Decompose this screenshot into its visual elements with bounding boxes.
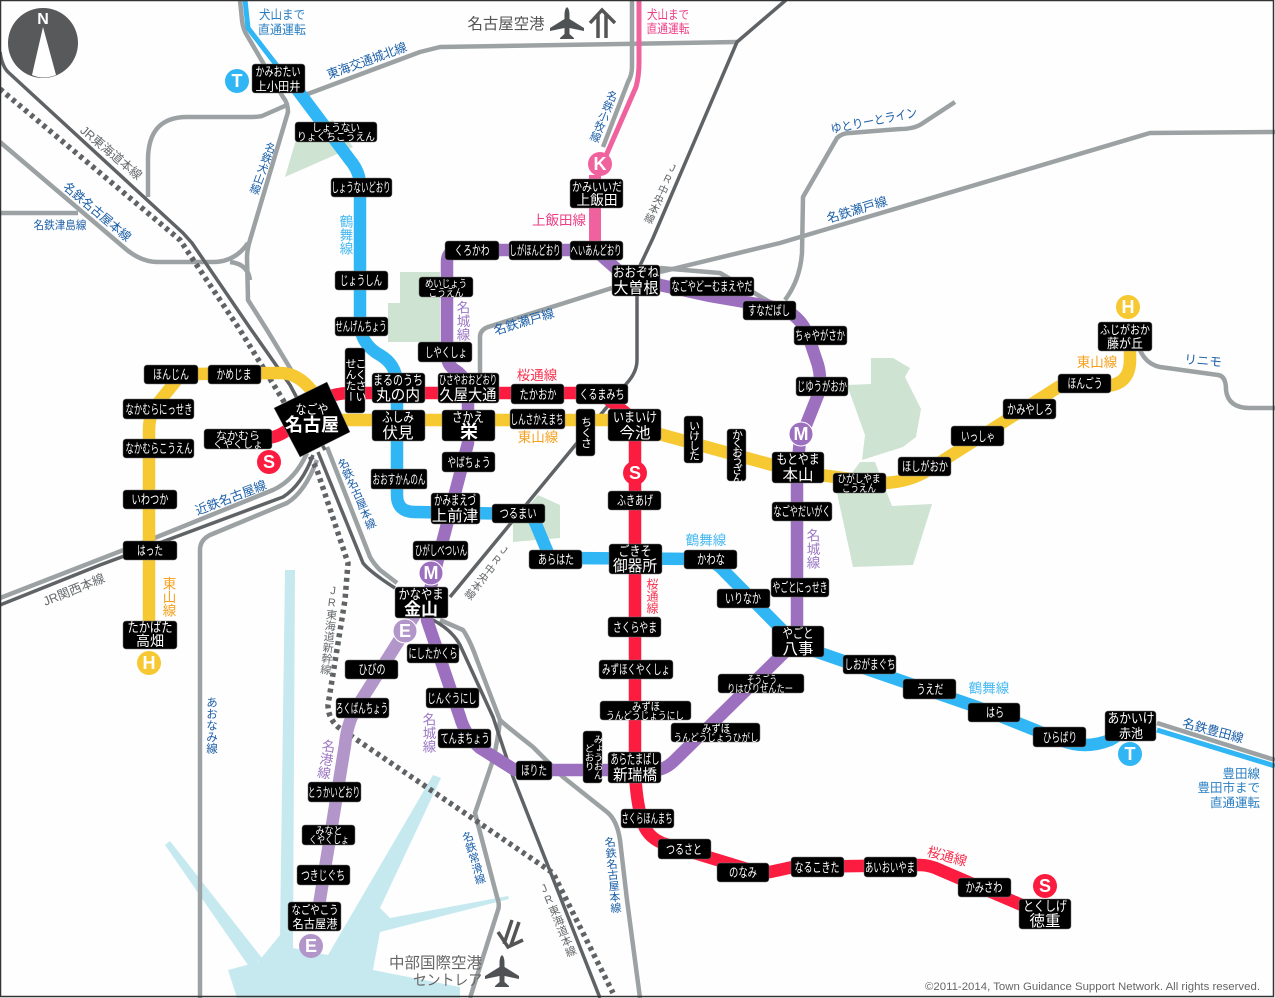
station: 御器所 (609, 544, 662, 575)
station: 中村区役所: なかむら (216, 430, 260, 442)
station: 平安通: へいあんどおり (570, 243, 622, 258)
station: 本郷 (1058, 374, 1111, 393)
label: あおなみ線: あおなみ線 (205, 696, 218, 754)
station: 本郷: ほんごう (1068, 376, 1102, 391)
badge S 中村区役所: S (263, 452, 275, 472)
station: 上社 (1003, 399, 1056, 419)
label: 名鉄犬山線: 名鉄犬山線 (247, 139, 278, 196)
station: いりなか: いりなか (725, 591, 761, 606)
station: 星ヶ丘: ほしがおか (902, 459, 948, 474)
station: 西高蔵 (407, 644, 459, 663)
station: 平安通 (570, 241, 623, 260)
station: 今池 (608, 409, 661, 442)
station: 原: はら (986, 705, 1004, 720)
stations (123, 64, 1156, 931)
station: 東海通: とうかいどおり (308, 785, 360, 800)
station: 名古屋港: 名古屋港 (292, 916, 338, 931)
station: 瑞穂運動場東 (671, 723, 760, 744)
station: 相生山 (864, 857, 917, 877)
station: 中村公園: なかむらこうえん (126, 441, 192, 456)
station: 鳴子北 (791, 857, 844, 877)
station: 今池: いまいけ (613, 410, 657, 425)
station: 名古屋: 名古屋 (285, 415, 339, 435)
station: 八事日赤: やごとにっせき (772, 580, 828, 595)
label: JR東海道新幹線: JR東海道新幹線 (318, 585, 340, 675)
station: 六番町: ろくばんちょう (336, 701, 388, 716)
badge H 藤が丘: H (1122, 297, 1134, 317)
station: 相生山: あいおいやま (865, 860, 915, 875)
badge S 徳重 (1033, 874, 1057, 898)
station: 上前津: かみまえづ (434, 493, 476, 508)
badge T 赤池: T (1124, 744, 1136, 764)
station: 中村日赤 (123, 399, 194, 419)
station: 総合リハビリセンター: そうごう (747, 673, 777, 686)
station: 矢場町 (442, 452, 495, 472)
station: 上前津 (431, 493, 480, 525)
station: 本陣: ほんじん (153, 367, 189, 382)
station: 新瑞橋: 新瑞橋 (613, 766, 657, 784)
station: 茶屋ヶ坂: ちゃやがさか (795, 328, 845, 343)
station: 新栄町 (510, 409, 565, 429)
station: 上小田井 (252, 64, 305, 94)
station: 丸の内: まるのうち (373, 373, 423, 388)
badge T 上小田井: T (232, 71, 242, 91)
station: 自由ヶ丘: じゆうがおか (797, 379, 847, 394)
station: 桜山: さくらやま (613, 620, 657, 635)
label: 豊田線 豊田市まで 直通運転: 豊田線 (1222, 766, 1260, 781)
station: 市役所: しやくしょ (425, 345, 467, 360)
subway line: Tsurumai (blue) (245, 0, 1275, 766)
station: 妙音通 (582, 731, 603, 783)
station: 川名 (684, 550, 737, 569)
label: JR東海道本線 upper: JR東海道本線 (77, 122, 146, 183)
station: 塩釜口: しおがまぐち (844, 657, 896, 672)
station: 上飯田 (570, 179, 623, 208)
station: 東山公園 (833, 472, 886, 494)
station: 自由ヶ丘 (796, 377, 848, 396)
label: 東海交通城北線: 東海交通城北線 (325, 39, 409, 82)
station: 黒川 (445, 241, 499, 260)
badge K: K (594, 154, 606, 174)
station: ナゴヤドーム前矢田 (670, 277, 754, 296)
station: 栄: さかえ (452, 410, 484, 425)
station: 名城公園 (419, 277, 473, 299)
station: 中村区役所 (204, 429, 272, 450)
station: 徳重 (1019, 899, 1071, 930)
badge S 中村区役所 (257, 450, 281, 474)
station: 栄: 栄 (460, 422, 478, 442)
label: 犬山まで直通運転: 犬山まで (259, 8, 305, 22)
subway line: Meijo (purple) (427, 250, 820, 770)
label: 鶴舞線 right: 鶴舞線 (969, 681, 1010, 696)
station: 桜山 (608, 617, 661, 637)
label: 桜通線 top: 桜通線 (517, 368, 558, 383)
station: 国際センター: せんたー (344, 358, 356, 402)
station: 東別院 (413, 541, 468, 560)
station: 中村公園 (123, 439, 194, 458)
subway line: Kamiiida (pink) (595, 0, 639, 250)
station: 妙音通: どおり (582, 744, 594, 771)
label: 豊田線 豊田市まで 直通運転 (1197, 766, 1260, 810)
label: 豊田線 豊田市まで 直通運転: 豊田市まで (1197, 781, 1260, 795)
station: 池下 (684, 416, 703, 463)
station: 名城公園: めいじょう (425, 278, 467, 290)
label: 名鉄名古屋本線 lower: 名鉄名古屋本線 (603, 835, 622, 914)
station: 瑞穂運動場東: うんどうじょうひがし (674, 731, 758, 744)
station: 瑞穂運動場西: うんどうじょうにし (606, 710, 684, 722)
label: 名城線 upper: 名城線 (454, 301, 470, 342)
label: JR関西本線: JR関西本線 (41, 570, 107, 609)
station: 植田 (903, 679, 956, 699)
station: 千種: ちくさ (580, 416, 592, 448)
label: 豊田線 豊田市まで 直通運転: 直通運転 (1210, 795, 1260, 810)
station: 高畑: 高畑 (136, 633, 164, 649)
station: 丸の内: 丸の内 (376, 386, 420, 404)
station: 平針: ひらばり (1043, 730, 1077, 745)
station: 上小田井: 上小田井 (256, 80, 300, 94)
station: 堀田: ほりた (521, 763, 547, 778)
parks (285, 120, 932, 567)
station: 本山 (772, 452, 824, 484)
station: 栄 (442, 410, 495, 442)
station: 東山公園: ひがしやま (838, 472, 880, 485)
label: 東山線 vertical: 東山線 (160, 577, 176, 618)
station: 瑞穂区役所 (599, 660, 673, 679)
station: 市役所 (418, 342, 472, 362)
station: 名城公園: こうえん (428, 287, 464, 299)
station: 高岳 (511, 384, 564, 404)
station: 高岳: たかおか (520, 387, 556, 402)
badge M 本山: M (794, 424, 808, 444)
station: 庄内通: しょうないどおり (332, 180, 390, 195)
badge H 高畑: H (142, 653, 156, 673)
badge S 徳重: S (1039, 876, 1051, 896)
station: 千種 (576, 409, 595, 456)
station: 庄内緑地公園: しょうない (312, 122, 360, 134)
station: 吹上 (608, 491, 661, 510)
station: 荒畑 (529, 550, 582, 569)
station: 吹上: ふきあげ (617, 493, 653, 508)
label: ゆとりーとライン: ゆとりーとライン (829, 106, 919, 136)
airport: Chubu Centrair: 中部国際空港 (389, 954, 482, 972)
copyright: ©2011-2014, Town Guidance Support Network. All rights reserved. (925, 981, 1260, 993)
station: 名古屋港: なごやこう (292, 902, 338, 917)
station: 高畑: たかばた (128, 620, 172, 635)
station: 藤が丘: 藤が丘 (1107, 336, 1143, 351)
station: 大須観音 (371, 469, 427, 489)
airport: Chubu Centrair (389, 920, 523, 989)
station: 鶴舞: つるまい (500, 506, 536, 521)
station: ナゴヤドーム前矢田: なごやどーむまえやだ (672, 279, 752, 294)
station: 瑞穂運動場西 (600, 701, 691, 722)
station: 鶴舞 (492, 504, 545, 523)
label: 近鉄名古屋線: 近鉄名古屋線 (193, 477, 269, 518)
compass: N (37, 11, 49, 28)
station: 名古屋: なごや (296, 402, 328, 417)
label: 犬山まで直通運転 (258, 8, 306, 37)
station: 六番町 (336, 698, 389, 718)
station: 瑞穂運動場西: みずほ (632, 701, 660, 713)
station: 金山: かなやま (398, 587, 444, 602)
station: 藤が丘 (1098, 322, 1152, 351)
station: 中村日赤: なかむらにっせき (126, 402, 192, 417)
station: 徳重: とくしげ (1023, 899, 1067, 914)
station: 名古屋大学 (772, 502, 832, 521)
station: 庄内通 (331, 178, 392, 197)
airport: Chubu Centrair: セントレア (413, 972, 482, 989)
station: 上前津: 上前津 (432, 507, 478, 525)
station: 浅間町 (335, 317, 388, 336)
badge E 名古屋港: E (305, 936, 317, 956)
station: 築地口 (297, 865, 350, 885)
station: 浅間町: せんげんちょう (336, 319, 386, 334)
badge M 金山: M (424, 563, 438, 583)
badge S 今池: S (629, 463, 641, 483)
station: 一社: いっしゃ (961, 429, 995, 444)
station: 亀島 (208, 365, 261, 384)
station: 名古屋港 (288, 902, 341, 931)
station: 浄心 (335, 271, 388, 290)
station: 港区役所: みなと (316, 825, 342, 837)
station: 伝馬町: てんまちょう (440, 731, 490, 746)
station: 浄心: じょうしん (340, 273, 382, 288)
station: 八事: やごと (782, 626, 814, 641)
station: 築地口: つきじぐち (301, 868, 345, 883)
label: 名鉄名古屋本線 upper: 名鉄名古屋本線 (60, 179, 135, 245)
subway line: Higashiyama (yellow) (149, 340, 1130, 640)
badge T 赤池 (1118, 742, 1142, 766)
station: 庄内緑地公園 (295, 122, 377, 143)
label: 桜通線 vertical: 桜通線 (645, 578, 659, 614)
station: 矢場町: やばちょう (448, 455, 490, 470)
label: 犬山まで直通運転 pink: 犬山まで (647, 8, 689, 22)
station: 志賀本通: しがほんどおり (510, 243, 560, 258)
label: 犬山まで直通運転 pink (646, 8, 690, 36)
label: 鶴舞線 center: 鶴舞線 (686, 533, 727, 548)
station: 伏見 (372, 410, 425, 442)
station: 赤池 (1105, 711, 1156, 741)
label: 名鉄津島線: 名鉄津島線 (34, 218, 87, 232)
station: 港区役所 (302, 825, 355, 846)
station: 今池: 今池 (619, 424, 651, 442)
station: 御器所: 御器所 (613, 557, 657, 575)
label: 犬山まで直通運転: 直通運転 (258, 22, 306, 37)
badge T 上小田井 (225, 69, 249, 93)
label: JR中央本線 upper: JR中央本線 (641, 161, 680, 226)
station: 高畑 (123, 620, 177, 649)
station: 金山: 金山 (404, 599, 438, 619)
subway line: Meiko (light purple) (315, 605, 421, 930)
label: リニモ: リニモ (1184, 352, 1222, 370)
station: 日比野 (345, 660, 398, 679)
station: 東別院: ひがしべついん (415, 543, 467, 558)
station: 名古屋大学: なごやだいがく (774, 504, 830, 519)
station: 野並: のなみ (729, 865, 757, 880)
station: 神宮西 (426, 688, 479, 708)
station: 伏見: ふしみ (382, 410, 414, 425)
station: 新瑞橋 (608, 752, 661, 784)
station: 国際センター: こくさい (354, 358, 366, 402)
station: 西高蔵: にしたかくら (408, 646, 458, 661)
label: 桜通線 right: 桜通線 (926, 844, 969, 869)
station: 瑞穂区役所: みずほくやくしょ (602, 662, 670, 677)
station: 妙音通: みょうおん (592, 734, 603, 780)
station: 八田 (123, 541, 177, 560)
station: 池下: いけした (688, 420, 700, 461)
badge E 名古屋港 (299, 934, 323, 958)
label: 名港線: 名港線 (314, 738, 337, 781)
station: 名古屋 (274, 382, 350, 457)
badge M 金山 (419, 561, 443, 585)
station: 上飯田: かみいいだ (572, 180, 622, 194)
station: 大曽根 (612, 265, 660, 297)
station: 国際センター (344, 348, 366, 413)
label: 上飯田線: 上飯田線 (532, 213, 586, 228)
label: 名鉄瀬戸線 left: 名鉄瀬戸線 (492, 305, 556, 338)
station: 一社 (951, 426, 1004, 446)
badge K (588, 152, 612, 176)
station: 総合リハビリセンター: りはびりせんたー (727, 683, 793, 695)
station: 大曽根: 大曽根 (614, 279, 659, 297)
station: 覚王山 (727, 428, 746, 482)
station: 茶屋ヶ坂 (794, 326, 847, 345)
badge M 本山 (789, 422, 813, 446)
station: 藤が丘: ふじがおか (1100, 322, 1150, 337)
station: 上社: かみやしろ (1007, 402, 1053, 417)
station: 東山公園: こうえん (842, 482, 876, 494)
station: 八事日赤 (771, 578, 829, 597)
station: 塩釜口 (843, 655, 896, 674)
compass (8, 8, 78, 78)
label: 名鉄瀬戸線 right: 名鉄瀬戸線 (825, 193, 889, 226)
airport: Nagoya Airport: 名古屋空港 (468, 15, 545, 33)
label: 犬山まで直通運転 pink: 直通運転 (646, 21, 690, 36)
badge H 高畑 (137, 651, 161, 675)
station: 本山: 本山 (782, 466, 814, 484)
station: 車道: くるまみち (580, 387, 624, 402)
subway line: Sakura-dori (red) (265, 393, 1045, 915)
label: 東山線 right: 東山線 (1077, 355, 1118, 370)
badge S 今池 (623, 461, 647, 485)
station: 覚王山: かくおうざん (730, 428, 743, 482)
station: 荒畑: あらはた (538, 552, 574, 567)
station: 赤池: 赤池 (1119, 726, 1143, 741)
label: 名城線 lower: 名城線 (420, 713, 436, 754)
station: 岩塚: いわつか (132, 492, 168, 507)
airport: Nagoya Airport (468, 7, 615, 39)
station: 黒川: くろかわ (454, 243, 490, 258)
label: 名鉄常滑線: 名鉄常滑線 (459, 829, 487, 886)
line badges (137, 69, 1142, 958)
station: 砂田橋 (743, 301, 796, 320)
station: 桜本町 (621, 809, 674, 828)
badge H 藤が丘 (1116, 295, 1140, 319)
station: 金山 (395, 587, 448, 619)
label: JR中央本線 lower: JR中央本線 (461, 542, 512, 602)
station: 川名: かわな (697, 552, 725, 567)
station: 野並 (717, 863, 769, 882)
station: 新瑞橋: あらたまばし (610, 752, 660, 767)
station: 徳重: 徳重 (1029, 912, 1061, 930)
station: 星ヶ丘 (898, 457, 951, 476)
badge E 金山 (393, 619, 417, 643)
station: 大須観音: おおすかんのん (372, 472, 426, 487)
station: 久屋大通: ひさやおおどおり (439, 373, 497, 387)
station: 八事: 八事 (782, 640, 814, 658)
station: 赤池: あかいけ (1108, 711, 1154, 726)
station: 堀田 (516, 761, 552, 780)
station: 亀島: かめじま (216, 367, 252, 382)
label: 名鉄小牧線: 名鉄小牧線 (587, 87, 620, 144)
water: Nagoya port (165, 570, 509, 998)
station: 八事 (772, 626, 824, 658)
station: 八田: はった (137, 543, 163, 558)
station: 庄内緑地公園: りょくちこうえん (297, 131, 375, 143)
station: 伝馬町 (438, 729, 491, 748)
station: 神宮西: じんぐうにし (428, 691, 476, 706)
station: いりなか (717, 589, 770, 608)
station: 植田: うえだ (916, 682, 944, 697)
station: 本山: もとやま (776, 452, 820, 467)
station: 中村区役所: くやくしょ (213, 438, 263, 450)
station: 伏見: 伏見 (382, 424, 414, 442)
label: 名鉄豊田線: 名鉄豊田線 (1181, 715, 1246, 746)
station: 鶴里: つるさと (666, 842, 702, 857)
station: 桜本町: さくらほんまち (622, 811, 672, 826)
station: 久屋大通: 久屋大通 (440, 386, 497, 404)
station: 御器所: ごきそ (618, 544, 652, 559)
station: 新栄町: しんさかえまち (510, 412, 564, 427)
station: 久屋大通 (438, 373, 499, 404)
station: 岩塚 (123, 490, 177, 509)
station: 総合リハビリセンター (718, 673, 804, 695)
station: 上飯田: 上飯田 (576, 192, 618, 208)
station: 平針 (1033, 727, 1086, 747)
station: 丸の内 (372, 373, 425, 404)
label: 名鉄名古屋本線 center: 名鉄名古屋本線 (334, 455, 378, 532)
badge E 金山: E (399, 621, 411, 641)
station: 車道 (576, 384, 628, 404)
label: 鶴舞線 vertical: 鶴舞線 (338, 215, 353, 256)
station: 原 (968, 703, 1020, 722)
station: 神沢: かみさわ (966, 880, 1002, 895)
station: 鳴子北: なるこきた (794, 860, 840, 875)
station: 東海通 (308, 782, 361, 802)
label: 名城線 right: 名城線 (804, 529, 820, 570)
station: 鶴里 (658, 839, 711, 859)
station: 上小田井: かみおたい (256, 65, 300, 79)
label: JR東海道本線 lower: JR東海道本線 (537, 881, 578, 959)
station: 日比野: ひびの (358, 662, 386, 677)
station: 神沢 (958, 878, 1011, 897)
station: 志賀本通 (509, 241, 562, 260)
station: 砂田橋: すなだばし (748, 303, 790, 318)
station: 本陣 (144, 365, 198, 384)
label: 東山線 center: 東山線 (518, 430, 559, 445)
station: 大曽根: おおぞね (613, 265, 659, 280)
station: 瑞穂運動場東: みずほ (702, 723, 730, 735)
station: 港区役所: くやくしょ (309, 834, 349, 846)
